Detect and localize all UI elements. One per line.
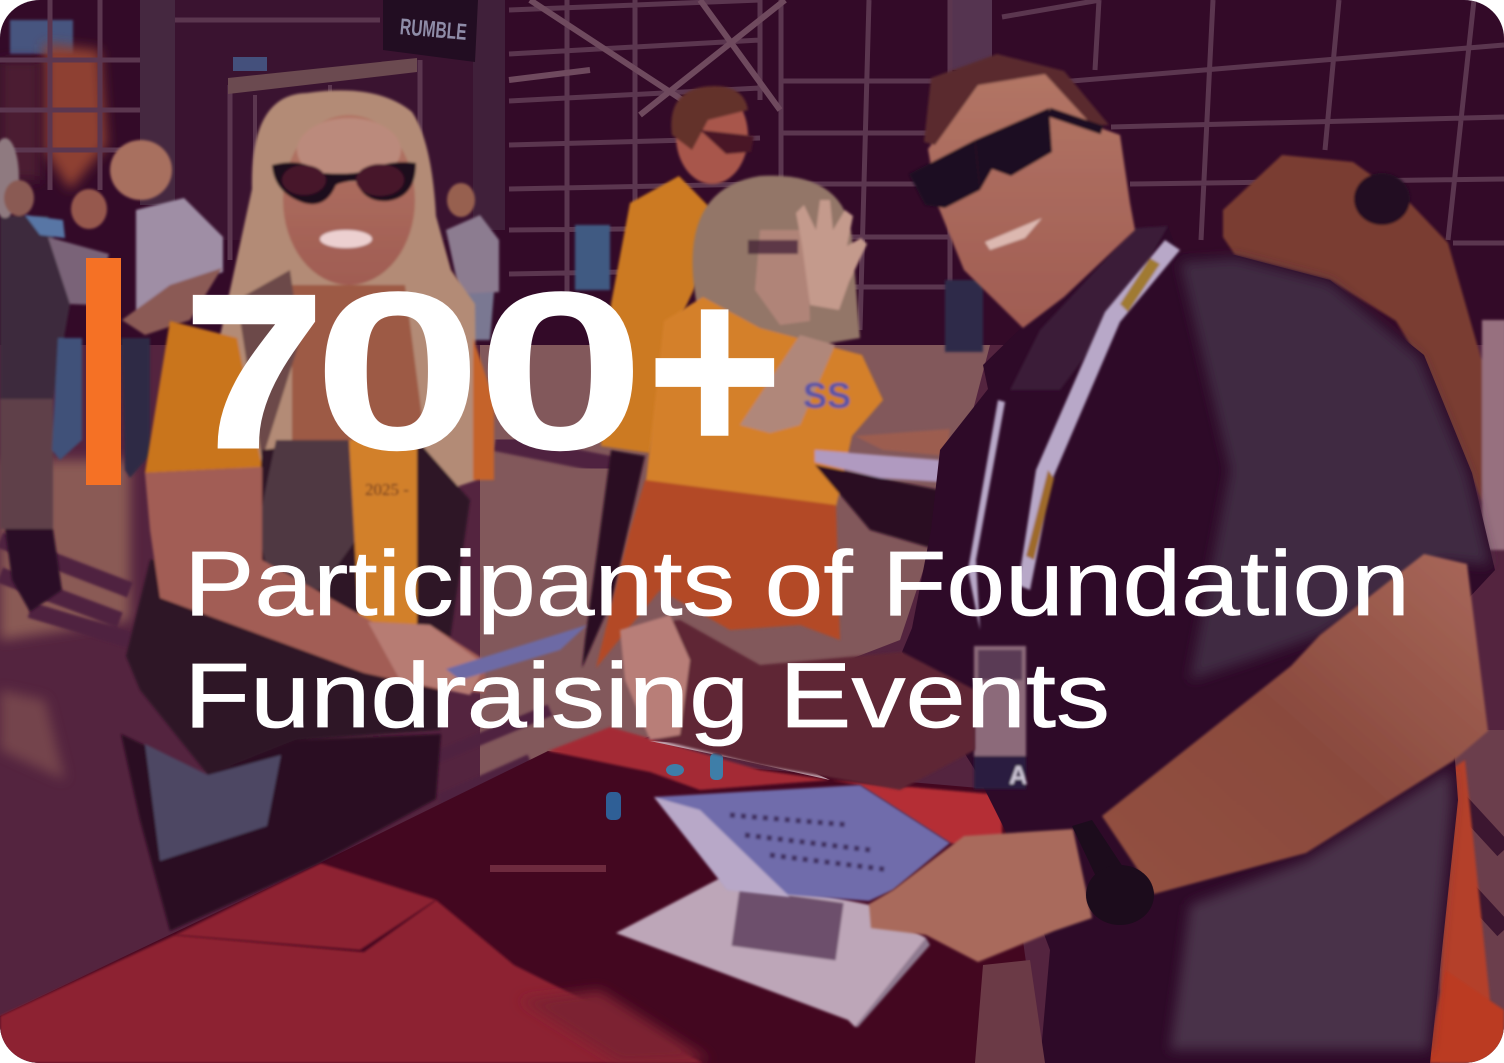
person: blonde woman with sunglasses [121, 90, 587, 931]
zero one: 0 [313, 244, 482, 497]
trousers sliver [975, 960, 1045, 1063]
person: orange-shirt man [582, 86, 754, 668]
big number [185, 233, 783, 506]
person: smiling man with lanyard [620, 54, 1495, 1063]
zero two: 0 [476, 244, 645, 497]
sign: RUMBLE: RUMBLE [399, 13, 468, 45]
shirt date: 2025 - [365, 480, 409, 499]
building facade [0, 0, 1504, 360]
hand [869, 829, 1092, 962]
person: orange-shirt woman waving [596, 176, 950, 668]
booklet with QR code [616, 875, 930, 1027]
pen [490, 865, 606, 872]
shirt [902, 226, 1495, 1063]
plus sign: + [647, 233, 783, 506]
left arm and fist [620, 615, 975, 790]
person: ponytail figure at right edge [1223, 155, 1504, 550]
caption [184, 533, 1410, 747]
caption line 2: Fundraising Events [184, 645, 1110, 747]
red table [0, 727, 1040, 1063]
lanyard and badge [968, 240, 1180, 790]
caption line 1: Participants of Foundation [184, 533, 1410, 635]
folded flyer [654, 785, 950, 901]
watch [1072, 820, 1154, 925]
digit seven: 7 [185, 251, 323, 492]
accent bar [86, 258, 121, 485]
right forearm [1102, 554, 1488, 894]
plaza floor [0, 345, 1504, 1063]
blue markers [606, 753, 723, 820]
hair and face [909, 54, 1135, 328]
badge letter: A [1009, 760, 1028, 790]
traffic cone [1428, 760, 1504, 1063]
background crowd [0, 138, 983, 612]
shirt logo: SS [803, 375, 851, 416]
